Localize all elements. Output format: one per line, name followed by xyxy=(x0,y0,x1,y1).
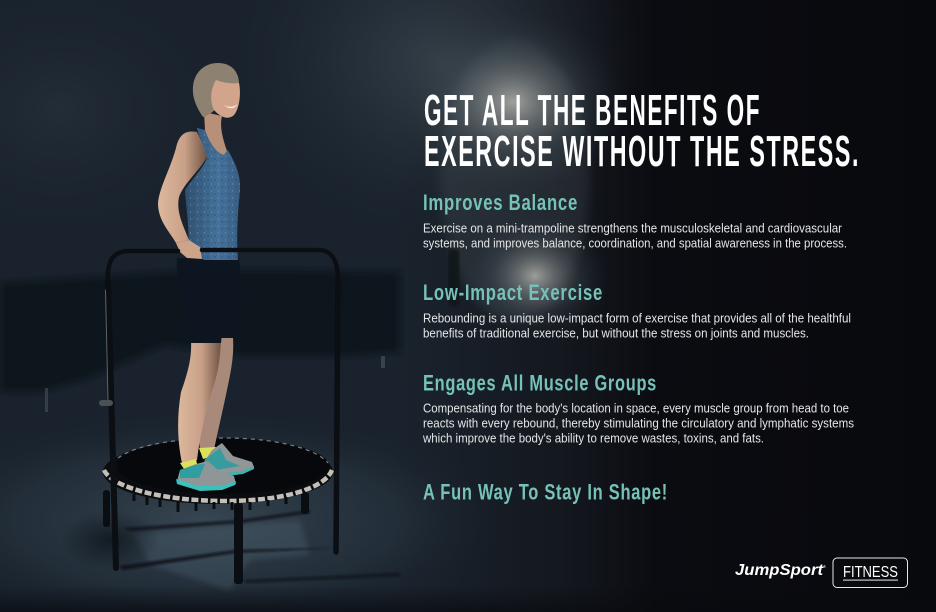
section: engages all muscle groups: Engages All Muscle Groups xyxy=(423,370,657,396)
adjuster knob xyxy=(102,400,110,406)
jumping mat xyxy=(117,438,329,494)
shorts xyxy=(177,258,241,343)
section: improves balance xyxy=(423,190,847,250)
logo: JumpSport: ® xyxy=(823,564,826,569)
handle bar xyxy=(102,250,338,568)
section: engages all muscle groups: reacts with every rebound, thereby stimulating the circulatory and lymphatic systems xyxy=(423,416,854,430)
title xyxy=(424,86,860,176)
tank top xyxy=(185,128,240,260)
section: low-impact exercise xyxy=(423,280,851,340)
logo: JumpSport: JumpSport xyxy=(735,562,824,579)
trampoline xyxy=(103,438,333,584)
section: engages all muscle groups xyxy=(422,370,854,446)
section: improves balance: systems, and improves balance, coordination, and spatial awareness in the process. xyxy=(423,236,847,250)
trampoline legs xyxy=(103,490,309,584)
head xyxy=(211,80,240,118)
frame ring xyxy=(103,440,333,504)
section: low-impact exercise: Low-Impact Exercise xyxy=(423,280,603,305)
neck xyxy=(204,112,227,155)
section: improves balance: Improves Balance xyxy=(423,190,578,215)
section: low-impact exercise: Rebounding is a unique low-impact form of exercise that provides all of the healthful xyxy=(423,312,851,326)
section: engages all muscle groups: which improve the body's ability to remove wastes, toxins, and fats. xyxy=(422,432,764,446)
section: engages all muscle groups: Compensating for the body's location in space, every muscle group from head to toe xyxy=(423,402,849,416)
person xyxy=(158,63,254,491)
front shoe xyxy=(177,461,236,488)
yellow socks xyxy=(199,447,216,459)
section: low-impact exercise: benefits of traditional exercise, but without the stress on joints and muscles. xyxy=(423,326,809,340)
closing line: A Fun Way To Stay In Shape! xyxy=(423,480,668,504)
arm xyxy=(158,132,207,243)
logo: fitness badge xyxy=(833,558,908,588)
hair back xyxy=(193,63,239,117)
back shoe xyxy=(204,443,254,476)
section: improves balance: Exercise on a mini-trampoline strengthens the musculoskeletal and cardiovascular xyxy=(423,222,842,236)
logo: fitness badge: FITNESS xyxy=(843,564,898,581)
white padded rim xyxy=(104,470,332,501)
couch in the background xyxy=(0,250,459,412)
back leg xyxy=(199,338,233,452)
front leg xyxy=(178,340,221,463)
smile xyxy=(224,104,238,108)
floor light patches and frame shadows xyxy=(60,510,400,590)
bungee cords xyxy=(134,491,304,512)
hand on bar xyxy=(176,240,202,259)
